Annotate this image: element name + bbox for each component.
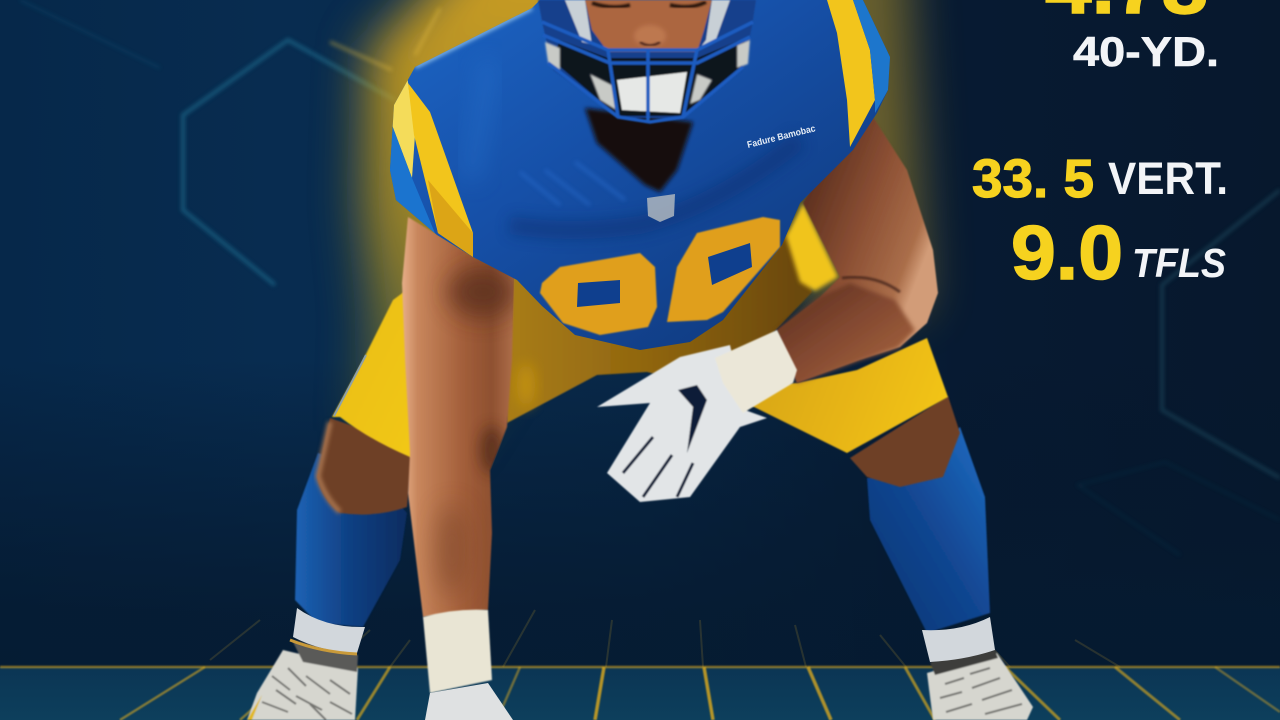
glove finger gaps [623, 437, 693, 497]
right white sock [922, 617, 995, 662]
floor grid [0, 610, 1280, 720]
glove [597, 330, 797, 502]
neck shadow [585, 108, 693, 192]
left calf sock [295, 453, 407, 627]
mouth guard [617, 72, 687, 113]
right knee [850, 396, 960, 487]
left glove [425, 683, 513, 720]
jersey fold shading [510, 140, 800, 230]
hexagon outline: left [20, 0, 395, 285]
helmet shell [538, 0, 756, 118]
left arm shading [436, 266, 516, 596]
mask interior [552, 38, 745, 116]
shorts: left hip [332, 280, 420, 460]
jersey number [540, 217, 780, 335]
jersey left sleeve blue [390, 126, 435, 234]
hexagon outline: right [1078, 190, 1280, 555]
stat: tackles for loss: TFLS [1132, 240, 1226, 286]
stat: vertical jump: 33. 5 [972, 149, 1094, 209]
face [585, 0, 712, 52]
face mask bars [542, 22, 753, 122]
glove swoosh [678, 385, 707, 453]
stat: tackles for loss: 9.0 [1011, 211, 1123, 296]
shorts: inner highlight [517, 363, 535, 407]
left ankle band [290, 640, 357, 654]
left white sock [293, 608, 365, 653]
jersey top edge light [415, 8, 532, 67]
shorts: yellow wedge under jersey [786, 203, 838, 291]
stat: vertical jump [972, 149, 1228, 209]
right shoe [927, 650, 1033, 720]
chest logo [647, 194, 675, 222]
yellow glow behind player [330, 0, 925, 450]
left arm [402, 217, 514, 617]
stat: tackles for loss [1011, 211, 1226, 296]
stat: vertical jump: VERT. [1108, 153, 1228, 204]
jersey left sleeve light stripe [392, 75, 415, 178]
right upper arm and forearm [777, 110, 938, 383]
left knee [317, 418, 412, 515]
helmet inner pads [565, 0, 730, 48]
jersey right shoulder stripe [827, 0, 875, 147]
shorts: crotch in shadow [500, 230, 812, 423]
shorts: left piping [334, 355, 366, 416]
helmet [538, 0, 756, 122]
right calf sock [867, 427, 990, 633]
glove wrist band [715, 330, 797, 413]
shorts: right thigh [740, 338, 948, 453]
player [247, 0, 1033, 720]
jersey [380, 0, 900, 360]
left wrist tape [423, 610, 492, 693]
jersey number counters [577, 243, 752, 307]
jersey right sleeve blue [853, 0, 892, 113]
jersey left shoulder stripe [408, 83, 473, 257]
left shoe [247, 640, 358, 720]
helmet side pads [545, 40, 750, 110]
stat: 40-yard dash [1045, 0, 1219, 75]
stat: 40-yard dash: 40-YD. [1073, 28, 1219, 75]
chest wordmark: Fadure Bamobac [746, 123, 817, 151]
